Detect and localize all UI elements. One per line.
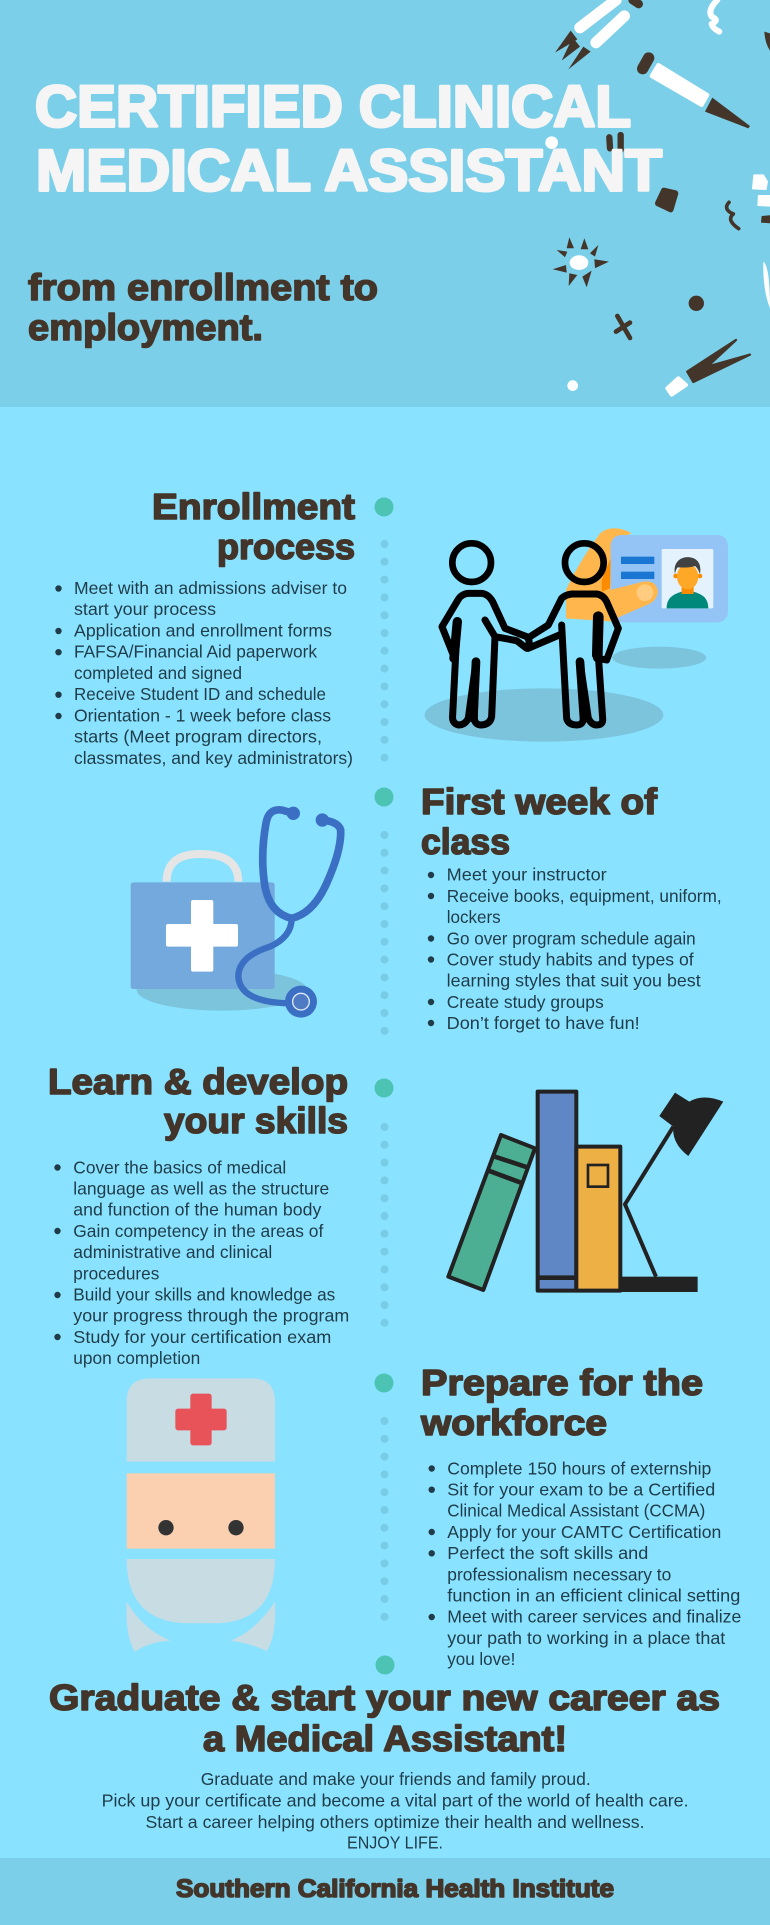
bullet list: enrollment: start your process: [74, 599, 216, 619]
bullet list: first week: Create study groups: [447, 992, 604, 1012]
bullet list: enrollment: Application and enrollment forms: [74, 620, 332, 640]
bullet list: skills: Build your skills and knowledge as: [73, 1284, 336, 1304]
bullet list: workforce: Sit for your exam to be a Certified: [447, 1480, 715, 1500]
text block: graduate message: ENJOY LIFE.: [347, 1832, 443, 1852]
text block: graduate message: Pick up your certificate and become a vital part of the world of health care.: [102, 1790, 689, 1810]
bullet list: skills: Study for your certification exam: [73, 1327, 331, 1347]
heading: graduate: [49, 1677, 720, 1759]
heading: first week of class: First week of: [421, 781, 658, 822]
bullet list: first week: learning styles that suit you best: [447, 971, 701, 991]
bullet list: workforce: you love!: [447, 1649, 515, 1669]
heading: graduate: a Medical Assistant!: [203, 1718, 567, 1759]
timeline: dotted connector: [374, 498, 394, 1674]
bullet list: first week: Go over program schedule again: [447, 928, 696, 948]
icon: handshake with ID card: [425, 528, 728, 742]
panel: graduate: [49, 1677, 720, 1852]
bullet list: skills: your progress through the program: [73, 1306, 349, 1326]
bullet list: first week: Cover study habits and types of: [447, 950, 694, 970]
footer: Southern California Health Institute: [176, 1875, 614, 1903]
bullet list: skills: Cover the basics of medical: [73, 1157, 286, 1177]
icon: nurse face: [126, 1378, 275, 1652]
bullet list: skills: upon completion: [73, 1348, 200, 1368]
bullet list: workforce: Clinical Medical Assistant (CCMA): [447, 1501, 705, 1521]
bullet list: enrollment: [55, 578, 353, 768]
bullet list: enrollment: Orientation - 1 week before class: [74, 706, 331, 726]
bullet list: skills: procedures: [73, 1263, 160, 1283]
bullet list: enrollment: FAFSA/Financial Aid paperwork: [74, 642, 317, 662]
heading: learn and develop: Learn & develop: [48, 1061, 348, 1102]
panel: first week of class: [421, 781, 722, 1033]
icon: books and desk lamp: [448, 1092, 723, 1292]
title: CERTIFIED CLINICAL: [35, 74, 631, 140]
bullet list: enrollment: starts (Meet program directors,: [74, 727, 322, 747]
bullet list: workforce: [428, 1458, 741, 1669]
subtitle: from enrollment to: [28, 267, 378, 308]
heading: learn and develop: [48, 1061, 348, 1141]
text block: graduate message: Graduate and make your friends and family proud.: [201, 1769, 591, 1789]
footer: [0, 1858, 770, 1925]
bullet list: workforce: Apply for your CAMTC Certification: [447, 1522, 721, 1542]
subtitle: employment.: [28, 307, 263, 348]
text block: graduate message: [102, 1769, 689, 1852]
bullet list: skills: [54, 1157, 349, 1368]
bullet list: workforce: function in an efficient clinical setting: [447, 1586, 740, 1606]
bullet list: workforce: Complete 150 hours of externship: [447, 1458, 711, 1478]
heading: graduate: Graduate & start your new career as: [49, 1677, 720, 1718]
heading: enrollment process: process: [217, 526, 355, 567]
panel: enrollment process: [55, 486, 355, 768]
heading: enrollment process: Enrollment: [152, 486, 355, 527]
icon: medical bag and stethoscope: [131, 807, 341, 1018]
panel: learn and develop your skills: [48, 1061, 349, 1368]
subtitle: [28, 267, 378, 348]
heading: learn and develop: your skills: [164, 1100, 348, 1141]
heading: prepare for the workforce: workforce: [420, 1402, 607, 1443]
bullet list: enrollment: completed and signed: [74, 663, 242, 683]
bullet list: skills: language as well as the structure: [73, 1178, 329, 1198]
heading: first week of class: [421, 781, 658, 862]
bullet list: enrollment: Receive Student ID and schedule: [74, 684, 326, 704]
heading: prepare for the workforce: [420, 1362, 703, 1443]
bullet list: workforce: professionalism necessary to: [447, 1564, 671, 1584]
title: [35, 74, 662, 204]
bullet list: workforce: Meet with career services and finalize: [447, 1607, 741, 1627]
bullet list: first week: lockers: [447, 907, 501, 927]
bullet list: enrollment: Meet with an admissions adviser to: [74, 578, 347, 598]
heading: first week of class: class: [421, 821, 510, 862]
bullet list: enrollment: classmates, and key administrators): [74, 748, 353, 768]
title: MEDICAL ASSISTANT: [36, 138, 662, 204]
bullet list: skills: Gain competency in the areas of: [73, 1221, 323, 1241]
header decorations: scattered medical doodles: [545, 0, 770, 395]
panel: header: [0, 0, 770, 407]
bullet list: first week: Meet your instructor: [447, 865, 607, 885]
bullet list: first week: [428, 865, 722, 1033]
panel: prepare for the workforce: [420, 1362, 741, 1669]
heading: enrollment process: [152, 486, 355, 567]
heading: prepare for the workforce: Prepare for the: [421, 1362, 703, 1403]
bullet list: workforce: Perfect the soft skills and: [447, 1543, 648, 1563]
bullet list: skills: and function of the human body: [73, 1200, 322, 1220]
text block: graduate message: Start a career helping others optimize their health and wellness.: [146, 1812, 644, 1832]
bullet list: workforce: your path to working in a place that: [447, 1628, 725, 1648]
bullet list: skills: administrative and clinical: [73, 1242, 272, 1262]
bullet list: first week: Don’t forget to have fun!: [447, 1013, 640, 1033]
bullet list: first week: Receive books, equipment, uniform,: [447, 886, 722, 906]
